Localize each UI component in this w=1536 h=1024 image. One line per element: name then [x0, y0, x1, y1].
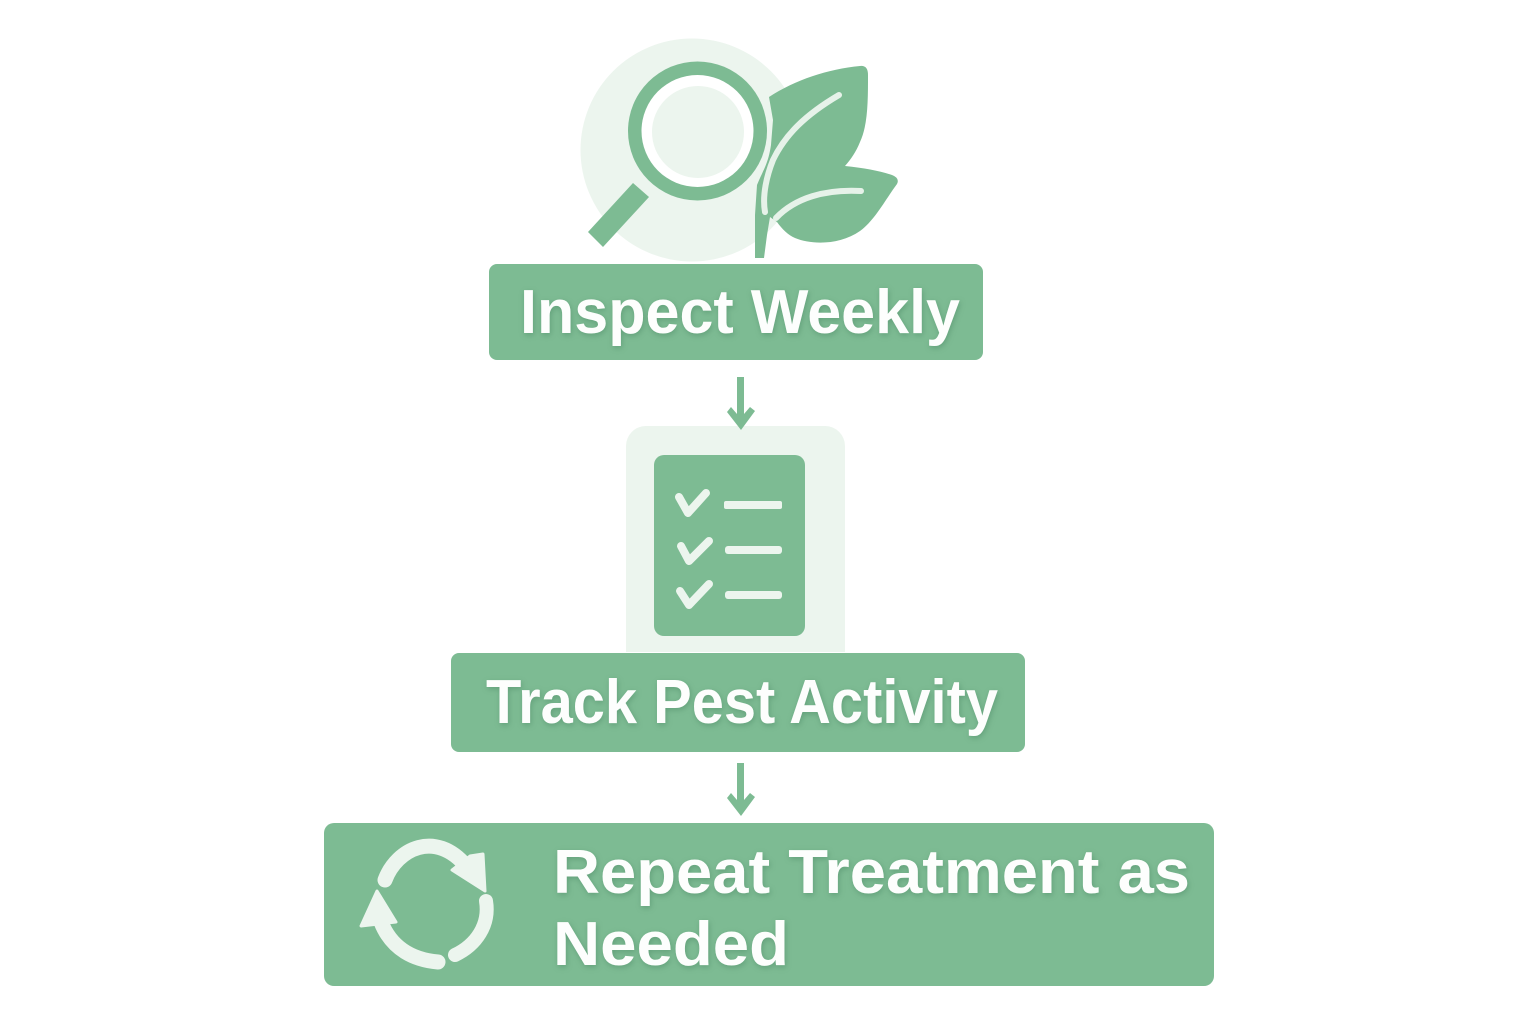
step 3: Repeat Treatment as Needed: [324, 823, 1214, 986]
step 2: Track Pest Activity: Track Pest Activity: [486, 668, 998, 737]
arrow: step 1 to step 2: [727, 377, 755, 430]
step 1: Inspect Weekly: Inspect Weekly: [520, 278, 961, 347]
icon: checklist: [626, 426, 845, 652]
arrow: step 2 to step 3: [727, 763, 755, 816]
step 3: Repeat Treatment as Needed: Repeat Treatment as: [553, 838, 1190, 907]
step 3: Repeat Treatment as Needed: Needed: [553, 910, 789, 979]
step 2: Track Pest Activity: [451, 653, 1025, 752]
icon: magnifying glass and leaf: [580, 38, 898, 262]
icon: leaf: [755, 66, 898, 258]
icon: repeat cycle: [361, 846, 487, 962]
checklist rows: [679, 493, 709, 605]
document: [654, 455, 805, 636]
icon: magnifying glass: [588, 62, 767, 247]
step 1: Inspect Weekly: [489, 264, 983, 360]
pale background circle: [580, 38, 804, 262]
pale card: [626, 426, 845, 652]
